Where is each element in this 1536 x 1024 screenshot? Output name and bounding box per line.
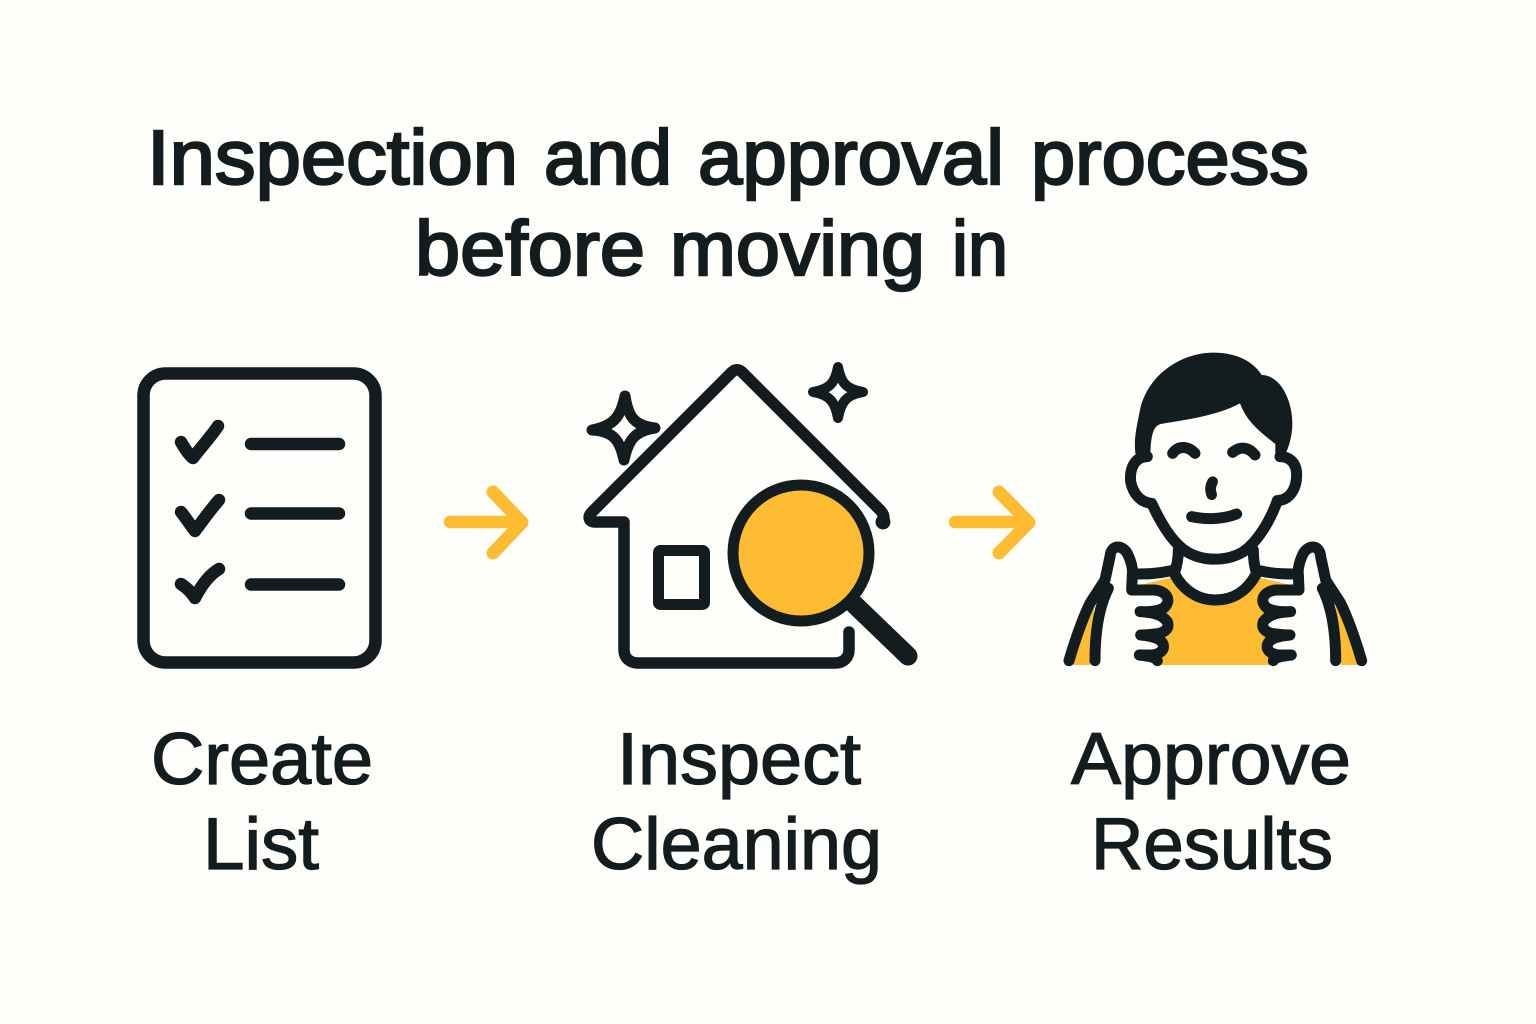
- arm fill slivers: [1073, 605, 1094, 665]
- icon: house with magnifying glass: [589, 367, 908, 663]
- sparkle left: [592, 396, 655, 460]
- sparkle right: [813, 367, 863, 418]
- title: [147, 115, 1309, 292]
- hair: [1135, 353, 1292, 457]
- checkmark and line 3: [181, 569, 339, 598]
- right hand and arm: [1259, 547, 1362, 661]
- checkmark and line 1: [181, 426, 339, 458]
- magnifier handle: [855, 605, 908, 656]
- icon: checklist: [144, 374, 376, 662]
- title: moving: [670, 206, 925, 292]
- label: Create List: Create: [151, 719, 373, 800]
- label: Approve Results: Approve: [1071, 719, 1351, 800]
- face outline: [1130, 457, 1297, 559]
- label: Create List: [151, 719, 373, 885]
- title: and: [544, 115, 672, 201]
- title: Inspection: [147, 115, 518, 201]
- label: Inspect Cleaning: [591, 719, 882, 885]
- label: Inspect Cleaning: Cleaning: [591, 804, 882, 885]
- icon: smiling person with thumbs up: [1069, 353, 1362, 665]
- neck and collar: [1174, 550, 1257, 600]
- window: [658, 550, 704, 604]
- arrow: step 1 to step 2: [450, 492, 522, 553]
- title: approval: [698, 115, 1004, 201]
- nose: [1211, 482, 1213, 495]
- eyes: [1173, 447, 1195, 453]
- title: in: [952, 206, 1008, 292]
- magnifier lens: [733, 485, 869, 621]
- mouth: [1192, 514, 1237, 519]
- label: Approve Results: [1071, 719, 1351, 885]
- roof end blob: [876, 514, 890, 530]
- label: Approve Results: Results: [1091, 804, 1333, 885]
- title: process: [1031, 115, 1309, 201]
- checkmark and line 2: [181, 500, 339, 531]
- label: Create List: List: [203, 804, 319, 885]
- house outline: [589, 370, 884, 663]
- arrow: step 2 to step 3: [955, 492, 1029, 553]
- shirt: [1140, 577, 1291, 665]
- left hand and arm: [1069, 547, 1172, 661]
- label: Inspect Cleaning: Inspect: [617, 719, 861, 800]
- title: before: [415, 206, 645, 292]
